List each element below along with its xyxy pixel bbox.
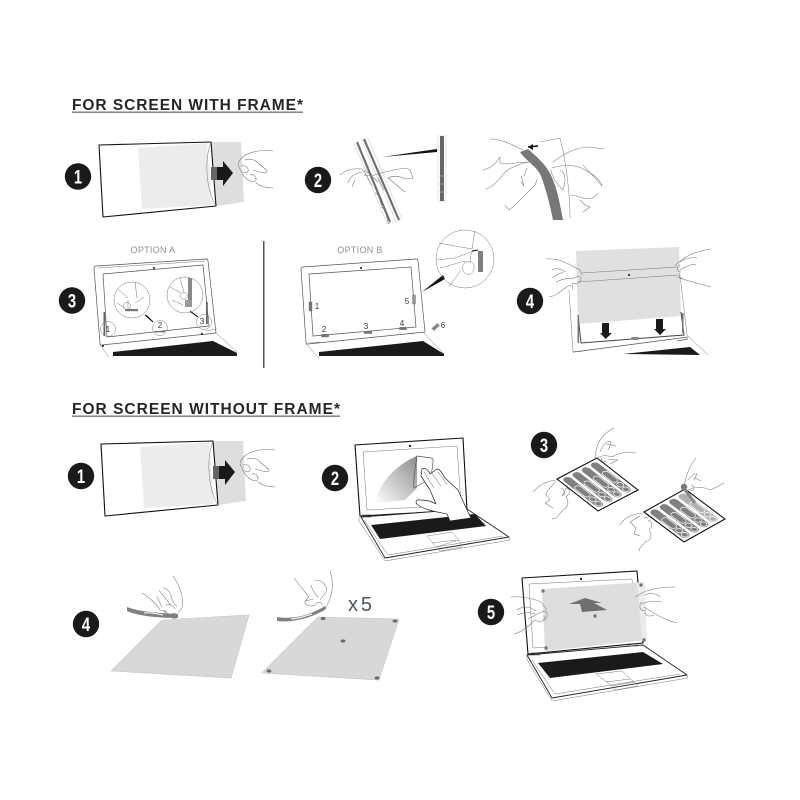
frame step 3 option A: laptop with magnified strips: 2: [158, 321, 163, 330]
frame step 3 option A: laptop with magnified strips: 3: [200, 317, 205, 326]
frame step 3 option A: laptop with magnified strips: [94, 245, 237, 357]
number badge 2: [322, 465, 348, 491]
heading: for screen without frame: FOR SCREEN WITHOUT FRAME*: [72, 401, 341, 418]
frame step 2: peeling backing: [483, 138, 604, 220]
frame step 1: pull filter from sleeve: [99, 142, 273, 217]
heading: for screen with frame: FOR SCREEN WITH FRAME*: [72, 97, 304, 114]
option B label: OPTION B: [337, 245, 383, 255]
number badge 2: 2: [331, 468, 339, 489]
number badge 1: [68, 463, 94, 489]
frame step 4: slide filter into tabs: [546, 247, 711, 355]
frame step 3 option B: laptop with numbered tabs: 5: [405, 297, 410, 306]
frameless step 1: pull filter from sleeve: [101, 441, 275, 516]
frame step 3 option B: laptop with numbered tabs: 4: [400, 319, 405, 328]
number badge 4: 4: [82, 614, 91, 635]
number badge 2: 2: [314, 170, 322, 191]
frameless step 5: apply filter to screen: [511, 571, 688, 701]
number badge 5: [478, 599, 504, 625]
frameless step 4a: peel sticker over filter: [111, 576, 249, 678]
frame step 3 option B: laptop with numbered tabs: 2: [322, 325, 327, 334]
number badge 3: 3: [68, 291, 76, 312]
number badge 3: [531, 432, 557, 458]
frame step 3 option B: laptop with numbered tabs: 3: [364, 322, 369, 331]
frameless step 2: clean screen with cloth: [355, 438, 510, 561]
number badge 3: [59, 287, 85, 314]
frame step 3 option B: laptop with numbered tabs: 1: [315, 302, 320, 311]
option A label: OPTION A: [131, 245, 175, 255]
frame step 3 option B: laptop with numbered tabs: 6: [441, 321, 446, 330]
number badge 4: [73, 611, 99, 637]
number badge 1: [65, 163, 91, 190]
number badge 2: [305, 167, 331, 193]
frame step 2: adhesive strips: [340, 136, 446, 224]
sticker sheet right: [644, 489, 725, 542]
frameless step 4b: five stickers placed on filter: [262, 571, 399, 680]
frame step 3 option B: laptop with numbered tabs: [301, 230, 494, 358]
number badge 4: [517, 288, 543, 314]
number badge 1: 1: [74, 167, 82, 188]
frameless step 3: sticker sheets: [533, 428, 725, 551]
divider between options: [263, 241, 264, 368]
placement arrow: [569, 598, 607, 612]
number badge 3: 3: [540, 435, 548, 456]
frame step 3 option A: laptop with magnified strips: 1: [106, 325, 111, 334]
multiplier label: x5: [348, 594, 372, 616]
number badge 5: 5: [487, 602, 495, 623]
sticker sheet left: [557, 458, 638, 511]
number badge 1: 1: [77, 466, 85, 487]
number badge 4: 4: [526, 291, 535, 312]
